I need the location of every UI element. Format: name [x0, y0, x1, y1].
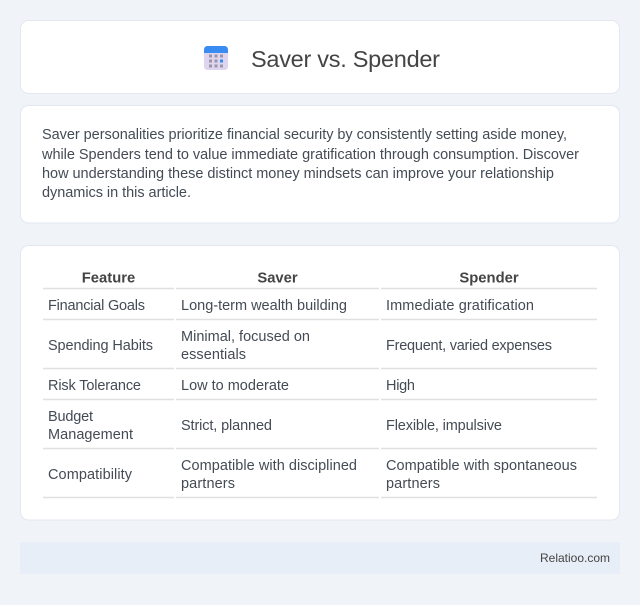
row: compatibility: Compatible with spontaneous [386, 458, 577, 474]
row: compatibility [48, 458, 577, 492]
panel: header [20, 20, 620, 94]
row: risk tolerance: Low to moderate [181, 378, 289, 394]
title: Saver vs. Spender [251, 46, 440, 72]
row: spending habits: Minimal, focused on [181, 329, 310, 345]
row: budget management [48, 409, 502, 443]
row: budget management: Budget [48, 409, 93, 425]
intro text [41, 127, 579, 201]
panel: comparison table [20, 246, 620, 520]
row: spending habits: Frequent, varied expenses [386, 338, 552, 354]
footer: Relatioo.com [540, 551, 610, 565]
row: compatibility: partners [181, 476, 235, 492]
icon: calendar [204, 46, 228, 70]
footer [20, 542, 620, 574]
intro text: while Spenders tend to value immediate gratification through consumption. Discover [41, 147, 579, 163]
row: compatibility: Compatible with disciplined [181, 458, 357, 474]
table header row: Saver [257, 270, 298, 286]
row: financial goals [48, 298, 534, 314]
row: budget management: Management [48, 427, 133, 443]
intro text: how understanding these distinct money mindsets can improve your relationship [42, 166, 554, 182]
row: risk tolerance: High [386, 378, 415, 394]
row: spending habits: essentials [181, 347, 246, 363]
row: spending habits: Spending Habits [48, 338, 153, 354]
panel: introduction [20, 106, 620, 223]
table header row [82, 270, 519, 286]
row: compatibility: Compatibility [48, 467, 133, 483]
row: financial goals: Immediate gratification [386, 298, 534, 314]
row: financial goals: Long-term wealth building [181, 298, 347, 314]
row: compatibility: partners [386, 476, 440, 492]
intro text: Saver personalities prioritize financial security by consistently setting aside money, [42, 127, 567, 143]
row: budget management: Strict, planned [181, 418, 272, 434]
intro text: dynamics in this article. [42, 185, 191, 201]
row: risk tolerance [48, 378, 415, 394]
row: financial goals: Financial Goals [48, 298, 145, 314]
row: risk tolerance: Risk Tolerance [48, 378, 141, 394]
table header row: Feature [82, 270, 135, 286]
table header row: Spender [459, 270, 519, 286]
row: spending habits [48, 329, 552, 363]
row: budget management: Flexible, impulsive [386, 418, 502, 434]
